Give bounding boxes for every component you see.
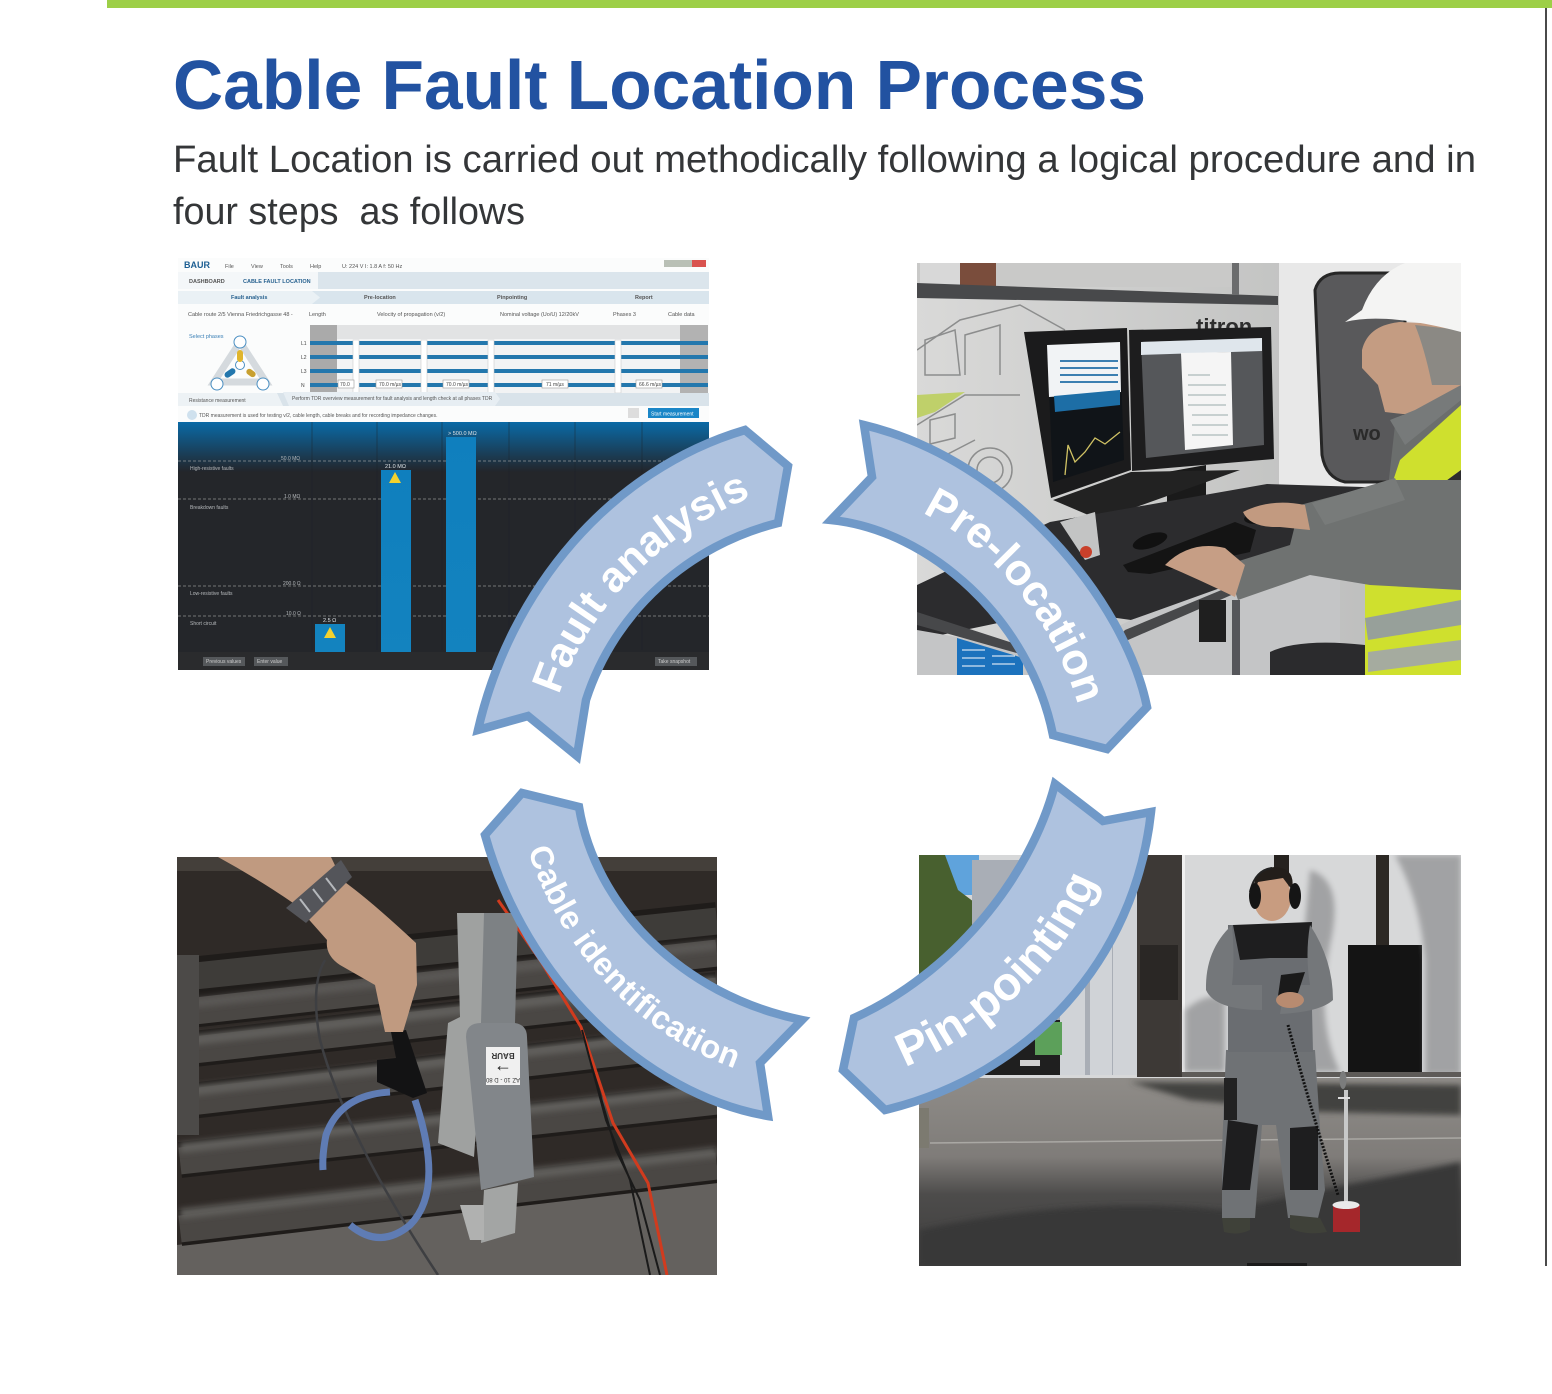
panel: fault analysis software screenshot: Phases 3 (613, 312, 636, 318)
panel: fault analysis software screenshot: File (225, 264, 234, 270)
panel: fault analysis software screenshot: Low-resistive faults (190, 591, 233, 597)
panel: fault analysis software screenshot: 70.0 m/µs (446, 382, 469, 388)
tree shadow on wall (1185, 855, 1461, 1075)
panel: fault analysis software screenshot: Cable data (668, 312, 696, 318)
grey clamp tool (438, 913, 534, 1243)
panel: fault analysis software screenshot: Start measurement (651, 412, 694, 418)
top green bar (107, 0, 1552, 8)
panel: fault analysis software screenshot (178, 258, 709, 670)
van behind arrow (985, 1020, 1060, 1075)
arrow: Pin-pointing (838, 776, 1156, 1115)
arrow: Pre-location: Pre-location (924, 488, 1098, 702)
panel: fault analysis software screenshot: CABLE FAULT LOCATION (243, 279, 311, 285)
grey clamp tool: AZ 10 - D 80 (485, 1076, 520, 1082)
panel: fault analysis software screenshot: L2 (301, 355, 307, 361)
operator (1165, 263, 1461, 675)
desk (917, 484, 1395, 640)
safety sign (957, 638, 1023, 675)
panel: fault analysis software screenshot: TDR measurement is used for testing v/2, cable length, cable breaks and for recording impedance changes. (199, 413, 437, 419)
panel: fault analysis software screenshot: Nominal voltage (Uo/U) 12/20kV (500, 312, 579, 318)
panel: fault analysis software screenshot: 50.0 MΩ (281, 456, 300, 462)
van window (1315, 273, 1405, 482)
panel: fault analysis software screenshot: Pre-location (364, 295, 396, 301)
probe lead (316, 960, 438, 1275)
panel: fault analysis software screenshot: Take snapshot (658, 659, 691, 665)
panel: fault analysis software screenshot: 200.0 Ω (283, 581, 301, 587)
blue flexible loop (323, 1092, 429, 1238)
panel: fault analysis software screenshot: L3 (301, 369, 307, 375)
panel: fault analysis software screenshot: 1.0 MΩ (284, 494, 301, 500)
head (1362, 322, 1461, 415)
panel: fault analysis software screenshot: Previous values (206, 659, 242, 665)
cable bundle (180, 920, 717, 1229)
drawer fronts (917, 588, 1221, 675)
panel: operator at pre-location workstation photo: titron (1196, 314, 1252, 339)
panel: fault analysis software screenshot: 70.0 m/µs (379, 382, 402, 388)
panel: fault analysis software screenshot: Breakdown faults (190, 505, 229, 511)
phase selector triangle (211, 336, 269, 390)
panel: fault analysis software screenshot: L1 (301, 341, 307, 347)
panel: fault analysis software screenshot: Report (635, 295, 653, 301)
intro text (173, 139, 1476, 233)
panel: fault analysis software screenshot: 10.0 Ω (286, 611, 301, 617)
panel: clamp on cable bundle photo (177, 857, 717, 1275)
panel: fault analysis software screenshot: 70.0 (340, 382, 350, 388)
panel: fault analysis software screenshot: Length (309, 312, 326, 318)
panel: fault analysis software screenshot: 71 m/µs (546, 382, 564, 388)
trees (919, 855, 972, 974)
panel: operator at pre-location workstation photo: wo (1352, 423, 1381, 445)
intro text: Fault Location is carried out methodically following a logical procedure and in (173, 139, 1476, 181)
panel: fault analysis software screenshot: High-resistive faults (190, 466, 234, 472)
hands (1243, 503, 1310, 530)
panel: fault analysis software screenshot: N (301, 383, 305, 389)
dark pillars and doorway (1274, 855, 1289, 886)
panel: fault analysis software screenshot: View (251, 264, 263, 270)
arrow: Fault analysis: Fault analysis (532, 479, 748, 692)
van drawing (917, 305, 1065, 492)
panel: operator at pre-location workstation photo (917, 263, 1461, 675)
bar chart: 21.0 MΩ (385, 464, 406, 470)
monitors (1024, 328, 1131, 498)
panel: fault analysis software screenshot: Velocity of propagation (v/2) (377, 312, 445, 318)
dark chart area (178, 472, 709, 652)
right border line (1545, 8, 1547, 1266)
black sensor clip (377, 1030, 427, 1098)
keyboard and mouse (1123, 522, 1256, 574)
bar chart: > 500.0 MΩ (448, 431, 477, 437)
panel: operator pin-pointing outdoors photo (919, 855, 1461, 1266)
hand and watch (218, 857, 417, 1032)
bar chart (315, 431, 477, 654)
panel: fault analysis software screenshot: Enter value (257, 659, 283, 665)
panel: fault analysis software screenshot: Select phases (189, 334, 224, 340)
panel: fault analysis software screenshot: 66.6 m/µs (639, 382, 662, 388)
bar chart: 2.5 Ω (323, 618, 336, 624)
monitor stand (1167, 465, 1206, 502)
red and black wires (498, 900, 667, 1275)
panel: fault analysis software screenshot: Short circuit (190, 621, 217, 627)
panel: fault analysis software screenshot: Perform TDR overview measurement for fault analysis and length check at all phases TDR (292, 396, 493, 402)
ground (919, 1078, 1461, 1266)
arrow: Pre-location (822, 419, 1152, 754)
pin-pointing operator (1206, 867, 1338, 1234)
panel: fault analysis software screenshot: Tools (280, 264, 293, 270)
panel: fault analysis software screenshot: DASHBOARD (189, 279, 225, 285)
panel: fault analysis software screenshot: Cable route 2/5 Vienna Friedrichgasse 48 - (188, 312, 293, 318)
panel: fault analysis software screenshot: Pinpointing (497, 295, 527, 301)
panel: fault analysis software screenshot: Help (310, 264, 321, 270)
arrow: Pin-pointing: Pin-pointing (894, 874, 1102, 1066)
panel: fault analysis software screenshot: Fault analysis (231, 295, 267, 301)
arrow: Fault analysis (472, 425, 793, 764)
arrow: Cable identification: Cable identification (530, 846, 738, 1068)
grey clamp tool: BAUR (491, 1051, 515, 1060)
arrow: Cable identification (480, 788, 810, 1122)
panel: fault analysis software screenshot: BAUR (184, 260, 210, 270)
building columns (972, 860, 1113, 1075)
title: Cable Fault Location Process (173, 46, 1146, 124)
grey clamp tool: ← (494, 1055, 512, 1075)
cable diagram strip (337, 339, 680, 393)
ground microphone (1332, 1071, 1360, 1232)
panel: fault analysis software screenshot: U: 224 V I: 1.8 A f: 50 Hz (342, 264, 402, 270)
intro text: four steps as follows (173, 191, 525, 233)
panel: fault analysis software screenshot: Resistance measurement (189, 398, 246, 404)
